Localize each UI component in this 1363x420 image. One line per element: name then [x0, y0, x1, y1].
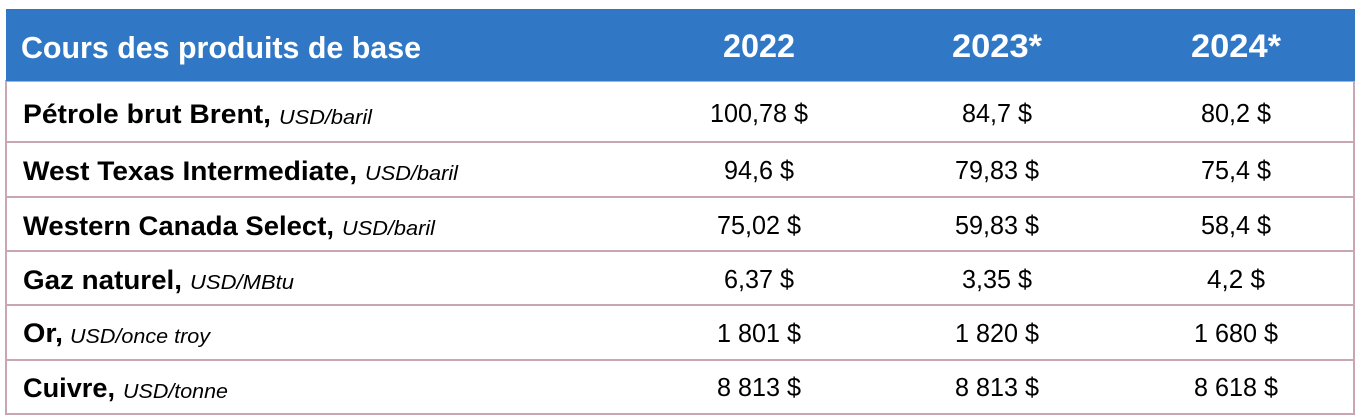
row: Cuivre: USD/tonne [123, 381, 228, 403]
row: Brent: USD/baril [279, 107, 373, 129]
row: Or: 1 801 $ [717, 318, 802, 348]
row: Gaz naturel: 6,37 $ [724, 264, 795, 294]
row: Western Canada Select: 58,4 $ [1201, 210, 1272, 240]
row: Western Canada Select: 59,83 $ [955, 210, 1040, 240]
row: Western Canada Select [23, 210, 1272, 241]
header band [6, 9, 1355, 81]
row: Brent: 100,78 $ [710, 98, 809, 128]
row: West Texas Intermediate: USD/baril [365, 163, 459, 185]
row: Cuivre: Cuivre, [23, 373, 115, 403]
header band: Cours des produits de base [21, 30, 421, 65]
row: Gaz naturel: 3,35 $ [962, 264, 1033, 294]
row: Brent: 80,2 $ [1201, 98, 1272, 128]
header band: 2023* [952, 28, 1043, 64]
row: West Texas Intermediate: 94,6 $ [724, 155, 795, 185]
row: Or [23, 318, 1279, 348]
row: Gaz naturel: USD/MBtu [190, 272, 294, 294]
row: Gaz naturel: 4,2 $ [1207, 264, 1266, 294]
row: Cuivre: 8 813 $ [717, 372, 802, 402]
table frame [6, 81, 1354, 414]
row: Western Canada Select: USD/baril [342, 218, 436, 240]
row: Brent: Pétrole brut Brent, [23, 99, 271, 129]
row: Brent: 84,7 $ [962, 98, 1033, 128]
row: Cuivre: 8 618 $ [1194, 372, 1279, 402]
row: Or: 1 820 $ [955, 318, 1040, 348]
row: Cuivre: 8 813 $ [955, 372, 1040, 402]
row: West Texas Intermediate: 75,4 $ [1201, 155, 1272, 185]
header band: 2022 [723, 28, 795, 64]
row: Or: USD/once troy [70, 326, 211, 348]
row: Cuivre [23, 372, 1279, 403]
row: Brent [23, 98, 1272, 129]
row: Gaz naturel [23, 264, 1266, 295]
header band: 2024* [1191, 28, 1282, 64]
row: West Texas Intermediate [23, 155, 1272, 186]
row: Gaz naturel: Gaz naturel, [23, 265, 182, 295]
row: Or: Or, [23, 318, 63, 348]
row: Western Canada Select: 75,02 $ [717, 210, 802, 240]
row: Or: 1 680 $ [1194, 318, 1279, 348]
row: West Texas Intermediate: 79,83 $ [955, 155, 1040, 185]
row: Western Canada Select: Western Canada Select, [23, 211, 334, 241]
row: West Texas Intermediate: West Texas Intermediate, [23, 156, 357, 186]
